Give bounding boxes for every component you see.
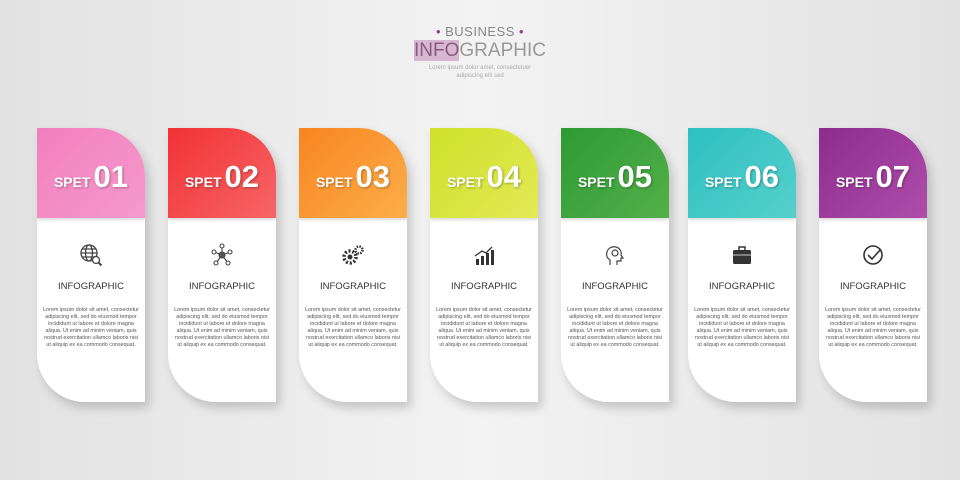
card 01: Lorem ipsum dolor sit amet, consectetur adipiscing elit, sed do eiusmod tempor incididunt ut labore et dolore magna aliqua. Ut enim ad minim veniam, quis nostrud exercitation ullamco laboris nisi ut aliquip ex ea commodo consequat.: [43, 307, 139, 348]
card 01: INFOGRAPHIC: [58, 281, 124, 292]
card 03: SPET03: [316, 159, 390, 194]
card 07: [819, 128, 927, 402]
card 04: INFOGRAPHIC: [451, 281, 517, 292]
card 01: [37, 128, 145, 402]
card 07: SPET07: [836, 159, 910, 194]
card 03: [299, 128, 407, 402]
card 06: INFOGRAPHIC: [709, 281, 775, 292]
card 04: SPET04: [447, 159, 521, 194]
card 05: [561, 128, 669, 402]
card 03: INFOGRAPHIC: [320, 281, 386, 292]
title: INFOGRAPHIC: [414, 40, 546, 61]
title: Lorem ipsum dolor amet, consectetuer: [429, 65, 531, 71]
card 05: SPET05: [578, 159, 652, 194]
card 02: [168, 128, 276, 402]
card 05: Lorem ipsum dolor sit amet, consectetur adipiscing elit, sed do eiusmod tempor incididunt ut labore et dolore magna aliqua. Ut enim ad minim veniam, quis nostrud exercitation ullamco laboris nisi ut aliquip ex ea commodo consequat.: [567, 307, 663, 348]
card 04: [430, 128, 538, 402]
card 05: INFOGRAPHIC: [582, 281, 648, 292]
card 03: Lorem ipsum dolor sit amet, consectetur adipiscing elit, sed do eiusmod tempor incididunt ut labore et dolore magna aliqua. Ut enim ad minim veniam, quis nostrud exercitation ullamco laboris nisi ut aliquip ex ea commodo consequat.: [305, 307, 401, 348]
card 06: Lorem ipsum dolor sit amet, consectetur adipiscing elit, sed do eiusmod tempor incididunt ut labore et dolore magna aliqua. Ut enim ad minim veniam, quis nostrud exercitation ullamco laboris nisi ut aliquip ex ea commodo consequat.: [694, 307, 790, 348]
card 06: SPET06: [705, 159, 779, 194]
card 06: [688, 128, 796, 402]
title: adipiscing elit sed: [456, 73, 504, 79]
card 07: INFOGRAPHIC: [840, 281, 906, 292]
title: • BUSINESS •: [436, 24, 524, 39]
card 02: SPET02: [185, 159, 259, 194]
card 01: SPET01: [54, 159, 128, 194]
title: [414, 24, 546, 79]
card 04: Lorem ipsum dolor sit amet, consectetur adipiscing elit, sed do eiusmod tempor incididunt ut labore et dolore magna aliqua. Ut enim ad minim veniam, quis nostrud exercitation ullamco laboris nisi ut aliquip ex ea commodo consequat.: [436, 307, 532, 348]
card 02: Lorem ipsum dolor sit amet, consectetur adipiscing elit, sed do eiusmod tempor incididunt ut labore et dolore magna aliqua. Ut enim ad minim veniam, quis nostrud exercitation ullamco laboris nisi ut aliquip ex ea commodo consequat.: [174, 307, 270, 348]
card 07: Lorem ipsum dolor sit amet, consectetur adipiscing elit, sed do eiusmod tempor incididunt ut labore et dolore magna aliqua. Ut enim ad minim veniam, quis nostrud exercitation ullamco laboris nisi ut aliquip ex ea commodo consequat.: [825, 307, 921, 348]
card 02: INFOGRAPHIC: [189, 281, 255, 292]
